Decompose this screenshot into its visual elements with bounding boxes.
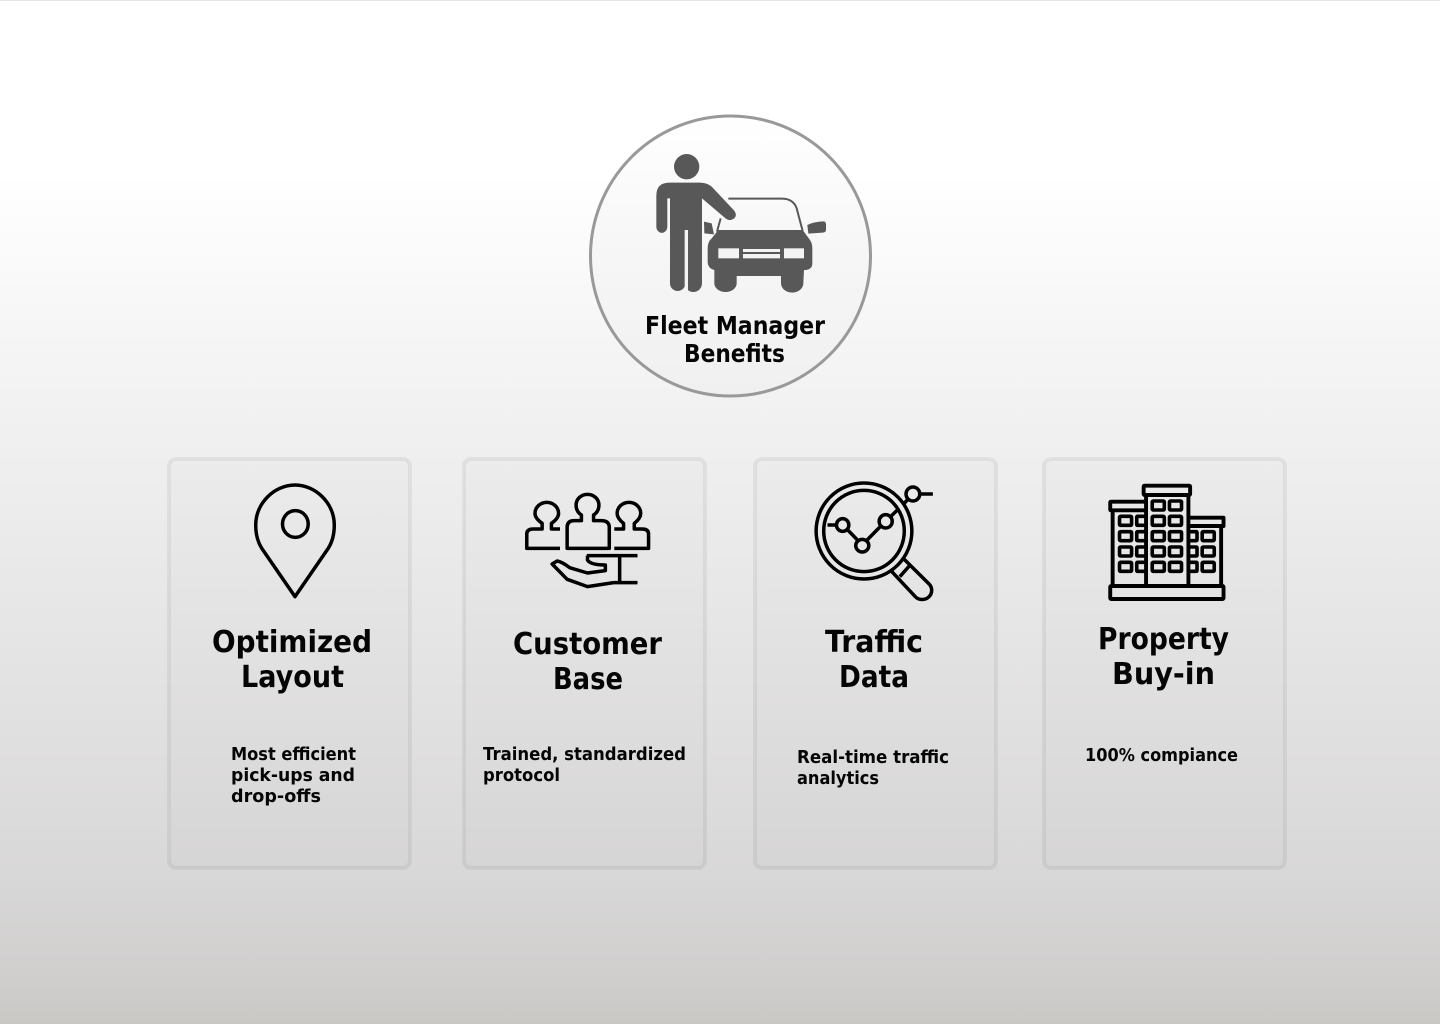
hero badge: Fleet Manager Benefits [590, 116, 870, 396]
description: protocol [483, 765, 560, 786]
title [513, 627, 662, 697]
title: Traffic [825, 625, 923, 660]
title [1098, 622, 1229, 692]
panel: Customer Base [464, 459, 705, 868]
hero title [645, 311, 826, 368]
description: drop-offs [231, 786, 321, 807]
title [825, 625, 923, 695]
icon: buildings [1110, 486, 1224, 599]
description [231, 744, 356, 807]
title: Base [553, 662, 623, 697]
icon: magnifier over line chart [816, 483, 933, 600]
description: 100% compiance [1085, 745, 1238, 766]
description: Real-time traffic [797, 747, 949, 768]
panel: Optimized Layout [169, 459, 410, 868]
title [212, 625, 372, 695]
description: Most efficient [231, 744, 356, 765]
title: Data [839, 660, 909, 695]
description [797, 747, 949, 789]
hero title: Benefits [684, 339, 785, 368]
description: Trained, standardized [483, 744, 686, 765]
title: Buy-in [1112, 657, 1215, 692]
title: Layout [241, 660, 344, 695]
title: Property [1098, 622, 1229, 657]
icon: map pin [256, 485, 334, 597]
panel: Property Buy-in [1044, 459, 1285, 868]
description: analytics [797, 768, 879, 789]
title: Customer [513, 627, 662, 662]
hero title: Fleet Manager [645, 311, 826, 340]
panel: Traffic Data [755, 459, 996, 868]
icon: fleet manager with car [656, 154, 826, 293]
description: pick-ups and [231, 765, 355, 786]
description [483, 744, 686, 786]
icon: customers on a hand [527, 494, 649, 587]
title: Optimized [212, 625, 372, 660]
